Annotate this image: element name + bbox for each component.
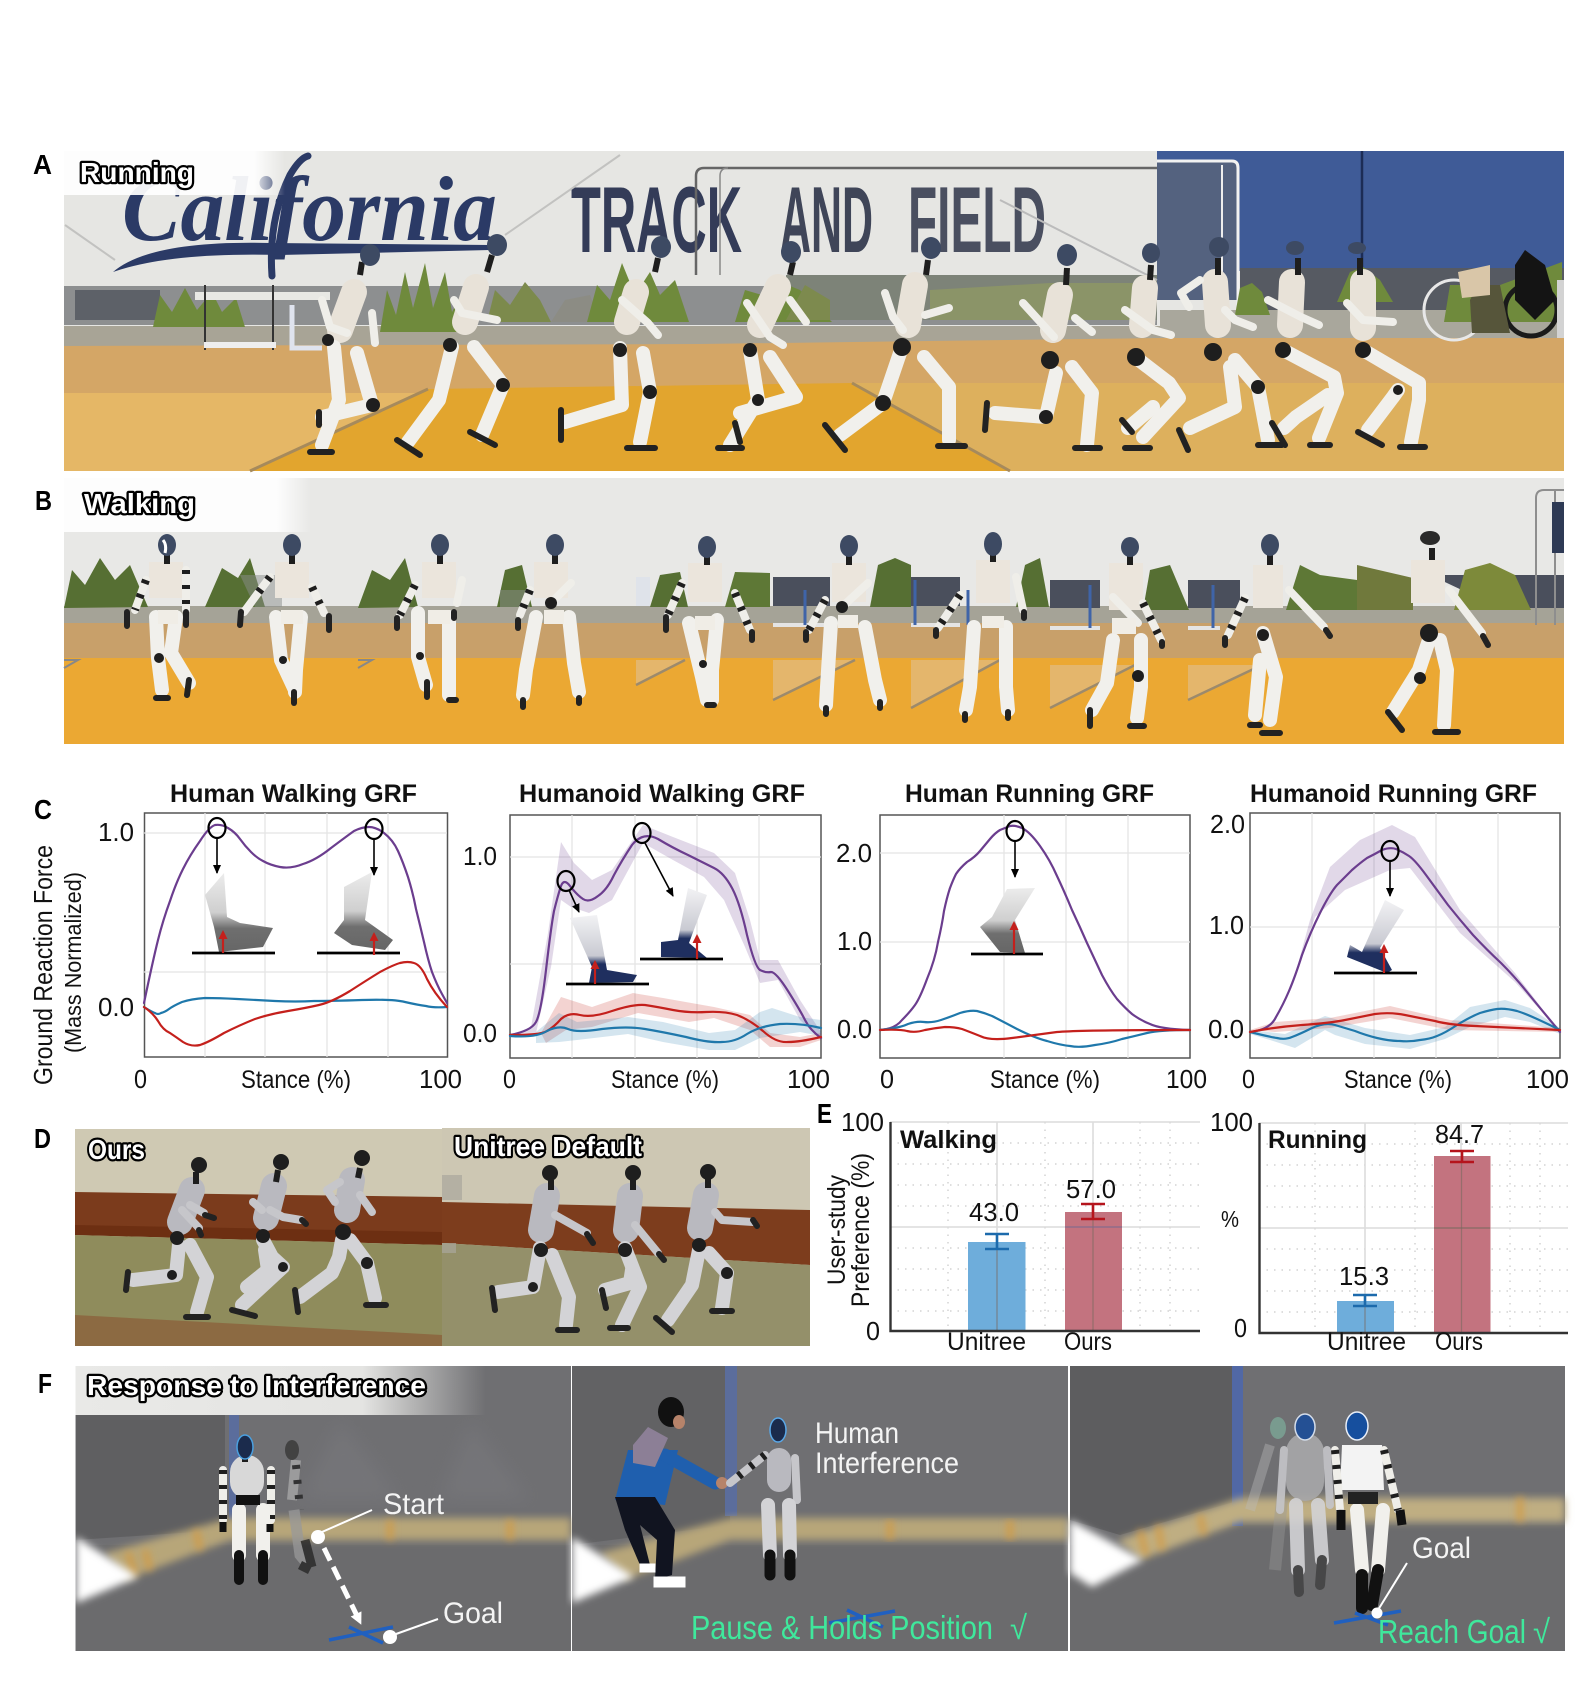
peak marker and foot 1 xyxy=(192,818,275,953)
tick labels: 100 xyxy=(1526,1064,1569,1094)
bar: unitree xyxy=(968,1242,1026,1331)
human figure xyxy=(615,1397,728,1586)
axis and value labels: 84.7 xyxy=(1435,1119,1484,1149)
axis and value labels: Unitree xyxy=(1327,1328,1406,1356)
robot 2 xyxy=(232,1154,306,1316)
robot shaking hands xyxy=(730,1418,797,1575)
robot 1 xyxy=(126,1157,214,1317)
robot walking 3 xyxy=(397,534,462,700)
panel D left: ours xyxy=(75,1129,442,1346)
plants xyxy=(153,288,245,327)
white label patch xyxy=(64,478,311,532)
robot walking 7 xyxy=(936,532,1024,720)
start marker xyxy=(311,1488,445,1544)
error bar: ours xyxy=(1081,1204,1105,1219)
robot walking 1 xyxy=(127,534,189,698)
tick labels xyxy=(1208,809,1569,1094)
axis and value labels: 100 xyxy=(841,1107,884,1137)
y axis label: user-study preference xyxy=(823,1153,875,1307)
axis and value labels xyxy=(841,1107,1116,1356)
robot walking 9 xyxy=(1225,534,1330,733)
peak marker and foot 1 xyxy=(558,871,649,984)
chart: humanoid running GRF xyxy=(1208,780,1569,1094)
tick labels: 0.0 xyxy=(463,1018,497,1048)
bands xyxy=(1295,825,1560,1032)
axis and value labels: 15.3 xyxy=(1339,1261,1389,1291)
text Reach Goal: Reach Goal xyxy=(1378,1613,1526,1650)
dark railings behind xyxy=(773,575,1564,608)
robot walking 2 xyxy=(240,534,329,703)
panel F1: start and goal xyxy=(76,1366,571,1651)
white label patch xyxy=(64,151,285,195)
sign: track and field: TRACK xyxy=(571,167,742,272)
mid robot xyxy=(1280,1414,1330,1592)
text Human Interference: Human xyxy=(815,1417,899,1450)
peak marker and foot 2 xyxy=(317,819,400,955)
tick labels: 100 xyxy=(1166,1064,1207,1094)
tick labels: 0.0 xyxy=(837,1014,872,1044)
robot running 2 xyxy=(397,234,510,455)
sign: track and field xyxy=(571,167,1046,272)
label Walking: Walking xyxy=(84,488,195,519)
tick labels xyxy=(836,838,1207,1094)
goal marker: Goal xyxy=(1412,1532,1471,1565)
bar: unitree xyxy=(1337,1301,1394,1333)
plants xyxy=(64,558,148,608)
title: Humanoid Running GRF xyxy=(1250,780,1537,808)
tick labels: Stance (%) xyxy=(611,1066,719,1094)
panel label B: B xyxy=(35,485,52,516)
axis and value labels: Ours xyxy=(1435,1328,1483,1356)
sign: California script: California xyxy=(122,158,497,260)
hurdle xyxy=(195,285,330,350)
axis and value labels: Walking xyxy=(900,1126,997,1154)
tick labels: 100 xyxy=(419,1064,462,1094)
bar chart: walking preference xyxy=(841,1107,1200,1356)
blurred barrier xyxy=(1118,1498,1565,1560)
label Unitree Default: Unitree Default xyxy=(454,1131,642,1162)
tick labels: 0 xyxy=(880,1064,894,1094)
robot running 3 xyxy=(561,236,671,448)
axis and value labels: 43.0 xyxy=(969,1197,1019,1227)
robot 6 xyxy=(656,1164,757,1332)
robot running 9 xyxy=(1268,241,1337,445)
text Reach Goal: √ xyxy=(1533,1613,1551,1650)
peak marker and foot xyxy=(1334,841,1417,973)
axis and value labels: 100 xyxy=(1210,1107,1253,1137)
title: Human Walking GRF xyxy=(170,780,417,808)
axis and value labels: Running xyxy=(1268,1126,1367,1154)
pole and sign xyxy=(1536,490,1564,625)
panel F3: reach goal xyxy=(1070,1366,1565,1651)
goal marker: Goal xyxy=(443,1597,503,1630)
title: Humanoid Walking GRF xyxy=(519,780,805,808)
robot walking 8 xyxy=(1090,537,1162,726)
goal marker xyxy=(329,1597,503,1644)
panel B: walking photo sequence xyxy=(64,478,1564,744)
start marker: Start xyxy=(383,1488,445,1521)
bar: ours xyxy=(1065,1212,1122,1331)
robot running 4 xyxy=(718,241,806,448)
robot walking 6 xyxy=(806,535,880,714)
axis and value labels: Unitree xyxy=(947,1328,1026,1356)
robot walking 5 xyxy=(666,536,752,705)
text Human Interference: Interference xyxy=(815,1447,959,1480)
tick labels: 0.0 xyxy=(98,992,134,1022)
label Ours: Ours xyxy=(88,1134,145,1165)
axis and value labels: Ours xyxy=(1064,1328,1112,1356)
axis and value labels: % xyxy=(1221,1206,1239,1232)
tick labels: 0.0 xyxy=(1208,1014,1244,1044)
bicycle xyxy=(1424,250,1564,340)
label Running: Running xyxy=(80,157,194,188)
tick labels: Stance (%) xyxy=(1344,1066,1452,1094)
sign: track and field: FIELD xyxy=(908,167,1046,272)
error bar: ours xyxy=(1450,1151,1474,1162)
tick labels xyxy=(463,841,830,1094)
bar chart: running preference xyxy=(1210,1107,1568,1356)
blurred barrier xyxy=(600,1518,1068,1580)
title patch xyxy=(76,1366,486,1415)
panel label F: F xyxy=(38,1368,52,1399)
bands xyxy=(510,825,821,1040)
blurred barrier xyxy=(105,1518,571,1580)
panel label E: E xyxy=(817,1098,832,1129)
axis and value labels: 0 xyxy=(866,1316,880,1346)
faded robot xyxy=(1250,1417,1286,1570)
robot running 5 xyxy=(825,237,965,450)
error bar: unitree xyxy=(985,1234,1009,1249)
tick labels: Stance (%) xyxy=(990,1066,1100,1094)
robot running 6 xyxy=(985,244,1100,448)
panel F2: human interference xyxy=(572,1366,1068,1651)
robot running 7 xyxy=(1122,243,1179,448)
error bar: unitree xyxy=(1353,1295,1377,1306)
panel label A: A xyxy=(33,149,52,180)
tick labels xyxy=(98,817,462,1094)
panel label C: C xyxy=(34,794,52,825)
y axis label: mass normalized: (Mass Normalized) xyxy=(60,872,86,1053)
tick labels: 1.0 xyxy=(463,841,497,871)
tick labels: 2.0 xyxy=(1210,809,1245,839)
tick labels: 0 xyxy=(134,1064,147,1094)
panel D right: unitree default xyxy=(442,1128,810,1346)
tick labels: Stance (%) xyxy=(241,1066,351,1094)
text Pause and Holds Position: √ xyxy=(1010,1609,1028,1646)
y axis label: ground reaction force: Ground Reaction Force xyxy=(28,845,58,1085)
tick labels: 1.0 xyxy=(98,817,134,847)
tick labels: 1.0 xyxy=(1209,910,1244,940)
chart: humanoid walking GRF xyxy=(463,780,830,1094)
panel label D: D xyxy=(34,1123,51,1154)
axis and value labels: 0 xyxy=(1234,1313,1247,1343)
front robot xyxy=(1335,1412,1402,1608)
robot walking 4 xyxy=(518,534,579,707)
robot front view xyxy=(223,1435,271,1580)
heading: Response to Interference xyxy=(87,1370,426,1401)
y axis label: user-study preference: Preference (%) xyxy=(847,1153,875,1307)
tick labels: 1.0 xyxy=(837,926,872,956)
axis and value labels: 57.0 xyxy=(1066,1174,1116,1204)
sign: track and field: AND xyxy=(780,167,873,272)
y axis label: user-study preference: User-study xyxy=(823,1175,851,1285)
robot 5 xyxy=(602,1165,664,1328)
text Human Interference xyxy=(815,1417,959,1480)
peak marker and foot xyxy=(971,821,1043,954)
title: Human Running GRF xyxy=(905,780,1154,808)
tick labels: 0 xyxy=(503,1064,516,1094)
chart: human walking GRF xyxy=(98,780,462,1094)
orange track lane xyxy=(250,383,1010,471)
robot running 8 xyxy=(1179,237,1282,450)
axis and value labels xyxy=(1210,1107,1484,1356)
panel A: running photo sequence xyxy=(64,151,1564,471)
robot 3 xyxy=(295,1150,386,1312)
dashed path arrow xyxy=(324,1548,360,1622)
tick labels: 0 xyxy=(1242,1064,1255,1094)
chart: human running GRF xyxy=(836,780,1207,1094)
tick labels: 100 xyxy=(787,1064,830,1094)
robot walking 10 xyxy=(1388,531,1488,732)
robot 4 xyxy=(492,1165,593,1330)
peak marker and foot 2 xyxy=(634,823,723,959)
cross marker xyxy=(829,1610,895,1627)
goal marker xyxy=(1334,1532,1471,1625)
tick labels: 2.0 xyxy=(836,838,872,868)
text Pause and Holds Position: Pause & Holds Position xyxy=(691,1609,993,1646)
robot running 1 xyxy=(310,244,380,452)
robot running 10 xyxy=(1347,242,1425,447)
robot side view xyxy=(285,1440,312,1570)
bar: ours xyxy=(1434,1156,1490,1333)
